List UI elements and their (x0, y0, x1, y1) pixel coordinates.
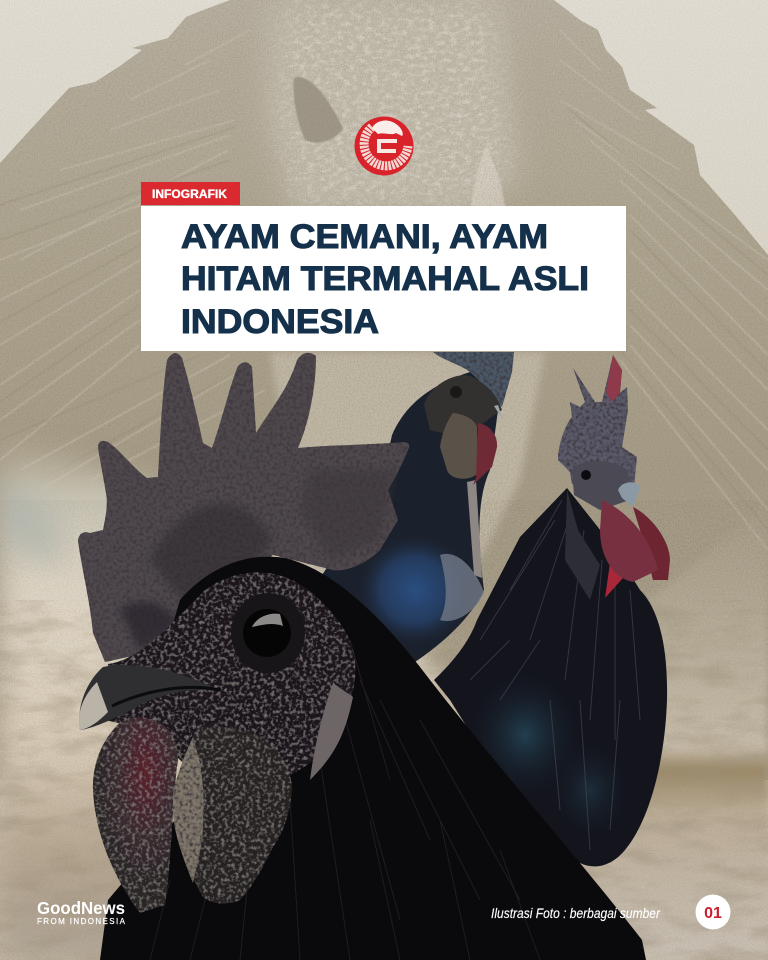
main rooster feather strokes (150, 640, 540, 960)
ground texture (0, 480, 768, 960)
right rooster feather strokes (470, 500, 640, 850)
eye highlight (252, 614, 283, 627)
title text: INDONESIA (181, 303, 379, 341)
comb shading (150, 504, 272, 610)
lower beak line (112, 687, 220, 706)
rooster: main foreground (78, 353, 646, 960)
middle rooster beak (494, 405, 503, 420)
left wattle (93, 717, 178, 913)
ground left, fading over ghost (0, 440, 520, 960)
logo badge (354, 116, 414, 176)
logo ring (364, 127, 408, 166)
ghost neck column (270, 352, 545, 560)
ear lobe (310, 683, 353, 780)
title text: HITAM TERMAHAL ASLI (181, 260, 589, 298)
main rooster head (105, 572, 355, 780)
title text: AYAM CEMANI, AYAM (181, 218, 548, 256)
middle rooster eye (450, 386, 462, 398)
middle rooster body (322, 372, 500, 662)
footer photo credit: Ilustrasi Foto : berbagai sumber (491, 905, 661, 921)
logo letter G (379, 141, 397, 151)
middle rooster blue sheen (357, 534, 473, 646)
ghost feather streaks (0, 30, 768, 550)
right rooster outer wattle (633, 507, 670, 580)
right rooster inner wattle (600, 500, 658, 582)
main rooster comb (78, 353, 409, 662)
right rooster beak (618, 482, 640, 507)
right rooster blue feathers (463, 665, 587, 805)
pale wattle strip (173, 737, 204, 883)
ground right, fading over ghost (470, 500, 768, 960)
title text (181, 218, 589, 341)
tag: INFOGRAFIK: INFOGRAFIK (152, 189, 228, 201)
right wattle (179, 726, 292, 904)
rooster: right, black (434, 355, 670, 866)
logo eagle head (372, 121, 403, 136)
main rooster body and neck (100, 557, 646, 960)
page number badge: 01 (704, 905, 722, 922)
middle rooster head (424, 375, 502, 436)
middle rooster lower feathers (440, 554, 484, 621)
ghost beak (470, 145, 505, 210)
right rooster comb (558, 355, 637, 500)
footer brand: GoodNews from Indonesia: FROM INDONESIA (37, 917, 126, 926)
right rooster eye (581, 470, 591, 480)
ghost head speckle (276, 0, 512, 206)
right rooster face (572, 461, 630, 510)
rooster: middle, blue-black (322, 352, 514, 662)
middle rooster wattles (440, 413, 478, 479)
title panel (141, 206, 626, 351)
eye (243, 609, 291, 657)
right rooster red lower lobe (605, 563, 623, 598)
middle rooster pale neck stripe (467, 480, 482, 578)
tag: INFOGRAFIK (141, 182, 240, 205)
footer brand: GoodNews from Indonesia: GoodNews (37, 898, 125, 918)
ghost eye (293, 77, 343, 143)
page number badge (696, 894, 730, 930)
right rooster neck hackles (565, 490, 600, 600)
middle rooster comb (433, 352, 514, 407)
eye socket (231, 593, 305, 673)
right rooster body (434, 488, 667, 866)
comb red edge (606, 355, 622, 402)
footer brand: GoodNews from Indonesia (37, 898, 126, 926)
beak (79, 665, 218, 730)
ghost head (265, 0, 520, 215)
